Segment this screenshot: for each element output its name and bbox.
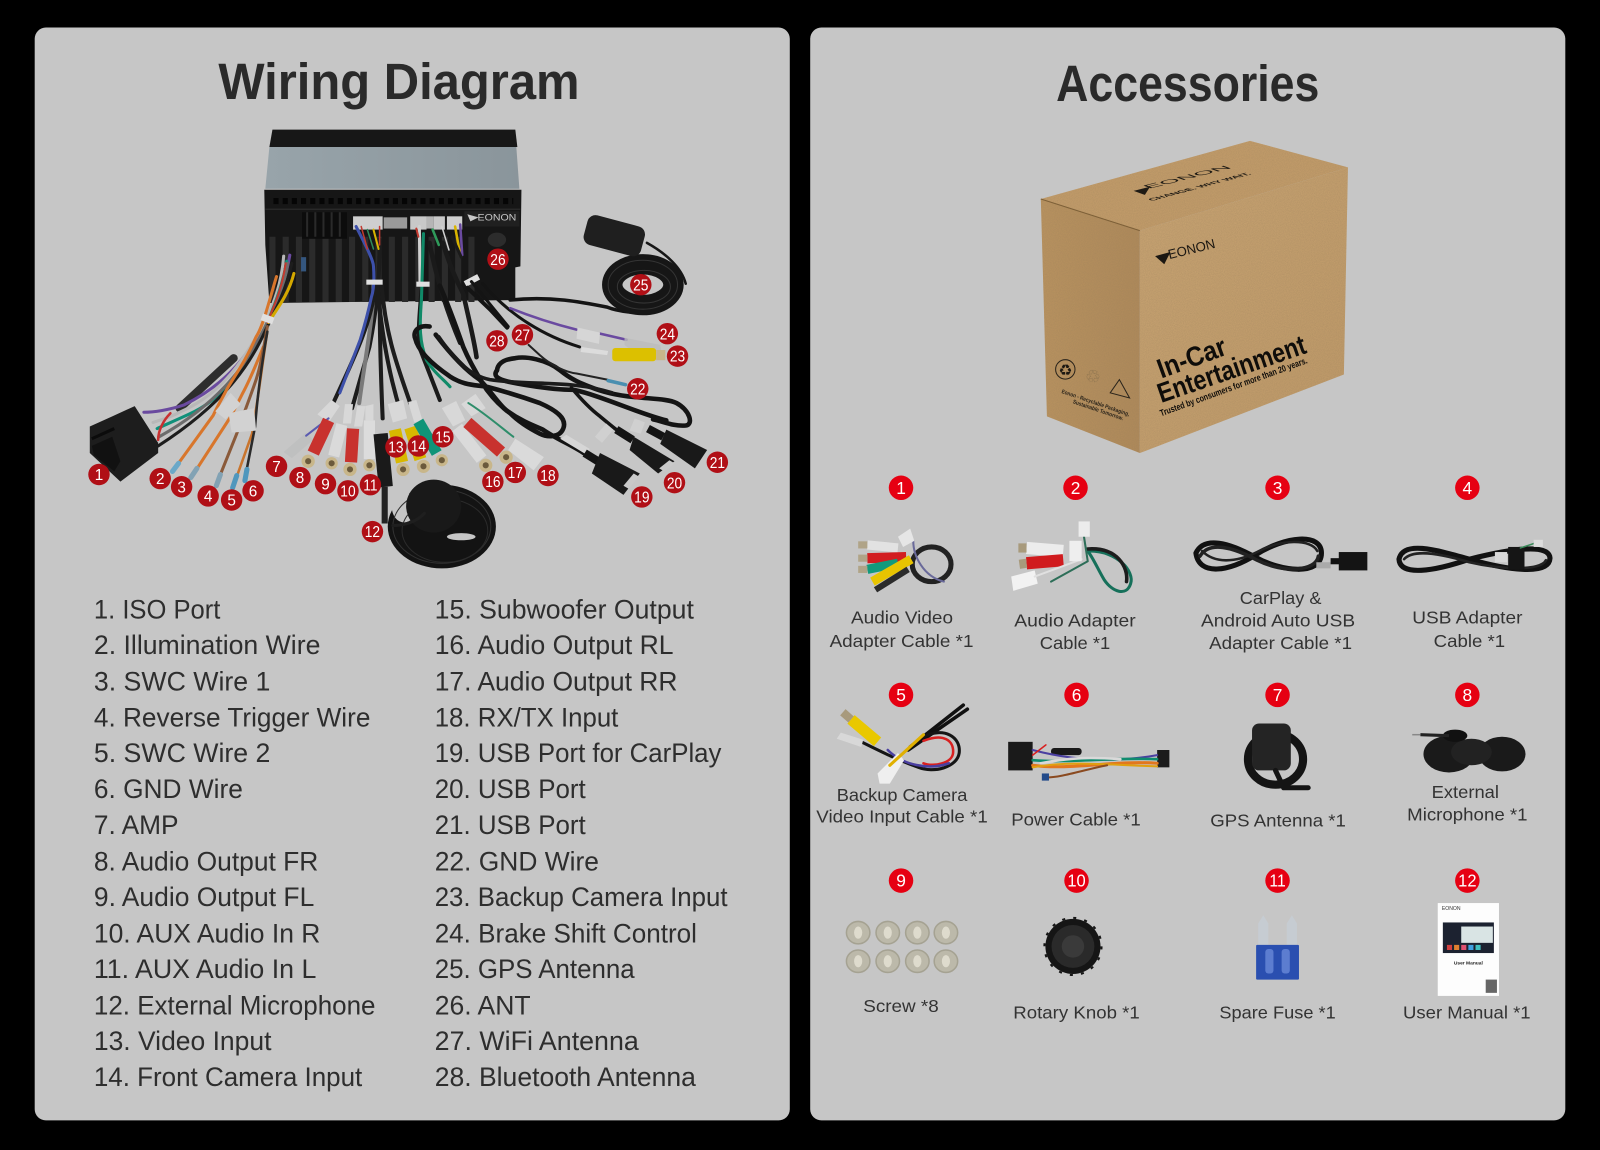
port list column 2: 26. ANT <box>435 990 531 1020</box>
number badges on wiring diagram: 2 <box>156 471 164 488</box>
badge 5: 5 <box>896 685 906 705</box>
number badges on wiring diagram: 18 <box>540 468 556 485</box>
label: User Manual *1 <box>1403 1002 1531 1022</box>
number badges on wiring diagram: 1 <box>95 467 103 484</box>
RCA 10 AUX R <box>343 429 357 476</box>
label: Rotary Knob *1 <box>1013 1002 1140 1022</box>
item 10: rotary knob <box>1013 868 1140 1022</box>
wire 4 reverse trigger <box>218 327 267 480</box>
number badges on wiring diagram: 4 <box>204 489 213 506</box>
number badges on wiring diagram: 21 <box>710 455 725 472</box>
badge 3: 3 <box>1273 478 1282 498</box>
number badges on wiring diagram: 23 <box>670 349 685 366</box>
wire 22 gnd <box>529 345 607 380</box>
number badges on wiring diagram: 20 <box>667 475 682 492</box>
number badges on wiring diagram: 10 <box>340 483 356 500</box>
port list column 1: 13. Video Input <box>94 1026 272 1056</box>
badge 7: 7 <box>1273 685 1282 705</box>
port list column 2: 17. Audio Output RR <box>435 666 678 696</box>
number badges on wiring diagram: 14 <box>411 439 426 456</box>
head unit rear view <box>264 130 521 303</box>
ISO harness wires <box>144 255 294 488</box>
manual icon: User Manual <box>1454 960 1484 966</box>
cable icon <box>837 705 967 784</box>
badge 7 <box>1265 683 1290 707</box>
brand logo on unit: EONON <box>478 212 516 222</box>
badge 10 <box>1064 868 1089 893</box>
badge 6: 6 <box>1072 685 1081 705</box>
port list column 1: 3. SWC Wire 1 <box>94 666 270 696</box>
badge 9 <box>889 868 913 893</box>
box top logo: CHANGE. WHY WAIT. <box>1146 172 1254 202</box>
port list column 1: 10. AUX Audio In R <box>94 918 320 948</box>
number badges on wiring diagram: 28 <box>489 333 505 350</box>
badge 11: 11 <box>1269 871 1286 891</box>
port list column 2: 15. Subwoofer Output <box>435 594 695 624</box>
port list column 1: 12. External Microphone <box>94 990 376 1020</box>
label: USB Adapter <box>1412 607 1522 627</box>
box front logo: EONON <box>1166 236 1217 262</box>
box top logo: EONON <box>1140 165 1235 190</box>
number badges on wiring diagram: 26 <box>490 252 506 269</box>
RCA 9 audio output FL <box>326 424 342 469</box>
number badges on wiring diagram: 3 <box>177 479 186 496</box>
port list column 2: 25. GPS Antenna <box>435 954 635 984</box>
screws icon <box>846 921 958 972</box>
label line 2: Android Auto USB <box>1201 611 1355 631</box>
port list column 1: 1. ISO Port <box>94 594 221 624</box>
badge 12: 12 <box>1458 871 1477 891</box>
label: Audio Adapter <box>1014 611 1136 631</box>
port list column 2: 22. GND Wire <box>435 846 599 876</box>
label: GPS Antenna *1 <box>1210 811 1346 831</box>
port list column 1: 14. Front Camera Input <box>94 1062 363 1092</box>
label: CarPlay & <box>1240 588 1322 608</box>
badge 4 <box>1455 476 1480 500</box>
label: Audio Video <box>851 607 953 627</box>
number badges on wiring diagram: 9 <box>321 476 330 493</box>
port list column 1: 8. Audio Output FR <box>94 846 318 876</box>
USB port 20 <box>595 423 674 473</box>
number badges on wiring diagram: 17 <box>508 465 523 482</box>
box recycling marks <box>1056 360 1130 422</box>
label: Screw *8 <box>863 996 939 1016</box>
port list column 2: 24. Brake Shift Control <box>435 918 697 948</box>
port list column 1: 9. Audio Output FL <box>94 882 314 912</box>
badge 6 <box>1064 683 1089 707</box>
panel: accessories <box>810 28 1565 1120</box>
item 2: audio adapter cable <box>1011 476 1136 653</box>
USB port 19 <box>560 435 640 495</box>
label: External <box>1432 782 1499 802</box>
title: Accessories: Accessories <box>1056 55 1319 112</box>
port list column 1: 6. GND Wire <box>94 774 243 804</box>
wire 3 swc 1 <box>194 347 263 473</box>
box recycling marks: Sustainable Tomorrow. <box>1072 399 1124 422</box>
label line 2: Video Input Cable *1 <box>816 806 988 826</box>
number badges on wiring diagram: 7 <box>272 459 281 476</box>
connector 7 AMP <box>284 418 329 458</box>
antenna icon <box>1248 723 1308 788</box>
RCA 14 front camera <box>410 428 430 473</box>
label: Power Cable *1 <box>1011 810 1141 830</box>
wires 27 28 antennas <box>471 282 508 327</box>
label: Backup Camera <box>837 785 967 805</box>
item 12: user manual <box>1403 868 1531 1022</box>
item 9: screws <box>846 868 958 1016</box>
manual icon: EONON <box>1442 906 1461 912</box>
number badges on wiring diagram: 19 <box>634 490 649 507</box>
port list column 2: 28. Bluetooth Antenna <box>435 1062 696 1092</box>
cable icon <box>1399 540 1550 570</box>
RCA 8 audio output FR <box>302 420 329 468</box>
cable icon <box>1196 539 1367 570</box>
box slogan: In-Car <box>1153 331 1231 384</box>
badge 2 <box>1063 476 1088 500</box>
manual icon <box>1438 903 1499 996</box>
item 8: external microphone <box>1407 683 1528 824</box>
port list column 1: 5. SWC Wire 2 <box>94 738 270 768</box>
ISO connector <box>90 406 158 482</box>
badge 12 <box>1455 868 1480 893</box>
number badges on wiring diagram: 25 <box>633 277 648 294</box>
box recycling marks: Eonon - Recyclable Packaging, <box>1061 389 1130 418</box>
microphone icon <box>1412 730 1526 772</box>
number badges on wiring diagram: 22 <box>630 381 645 398</box>
item 6: power cable <box>1008 683 1169 830</box>
number badges on wiring diagram: 16 <box>485 474 501 491</box>
number badges on wiring diagram: 27 <box>515 327 530 344</box>
badge 2: 2 <box>1071 478 1080 498</box>
badge 1: 1 <box>896 478 906 498</box>
port list column 2: 20. USB Port <box>435 774 586 804</box>
port list column 2: 21. USB Port <box>435 810 586 840</box>
central RCA wire bundle <box>317 224 486 427</box>
cable icon <box>1011 521 1131 592</box>
box slogan <box>1153 329 1310 418</box>
port list column 1: 11. AUX Audio In L <box>94 954 316 984</box>
knob icon <box>1044 918 1102 975</box>
port list column 1: 2. Illumination Wire <box>94 630 320 660</box>
USB cables <box>415 286 690 453</box>
badge 8 <box>1455 683 1480 707</box>
item 1: audio video adapter cable <box>830 476 974 651</box>
RCA label tags <box>317 394 486 427</box>
item 5: backup camera video input cable <box>816 683 988 826</box>
number badges on wiring diagram: 13 <box>388 440 404 457</box>
badge 5 <box>889 683 913 707</box>
badge 4: 4 <box>1463 478 1473 498</box>
panel: wiring diagram <box>35 28 790 1120</box>
badge 9: 9 <box>896 871 906 891</box>
port list column 2 <box>435 594 728 1092</box>
connector 18 RX/TX <box>468 403 544 470</box>
fuse icon <box>1256 915 1299 980</box>
label line 2: Microphone *1 <box>1407 804 1528 824</box>
label line 3: Adapter Cable *1 <box>1209 633 1352 653</box>
wiring connectors <box>353 216 462 230</box>
label line 2: Adapter Cable *1 <box>830 631 974 651</box>
brand logo on unit <box>467 212 516 222</box>
port list column 1: 7. AMP <box>94 810 179 840</box>
RCA 17 audio RR <box>467 422 513 464</box>
badge 8: 8 <box>1463 685 1472 705</box>
wire tags <box>215 393 241 419</box>
GPS antenna <box>510 213 686 312</box>
number badges on wiring diagram: 11 <box>363 477 378 494</box>
number badges on wiring diagram: 8 <box>296 470 304 487</box>
RCA 15 subwoofer <box>418 421 448 466</box>
port list column 1 <box>94 594 376 1092</box>
badge 10: 10 <box>1067 871 1086 891</box>
port list column 1: 4. Reverse Trigger Wire <box>94 703 370 733</box>
port list column 2: 27. WiFi Antenna <box>435 1026 639 1056</box>
port list column 2: 19. USB Port for CarPlay <box>435 738 722 768</box>
label line 2: Cable *1 <box>1434 631 1505 651</box>
cable icon <box>1008 742 1169 781</box>
cable tie <box>261 313 274 324</box>
badge 1 <box>889 476 913 500</box>
item 4: USB adapter cable <box>1399 476 1550 651</box>
number badges on wiring diagram: 6 <box>249 483 257 500</box>
RCA 13 video input <box>395 430 410 476</box>
box slogan: Entertainment <box>1153 329 1310 409</box>
wire 5 swc 2 <box>236 332 267 480</box>
port list column 2: 23. Backup Camera Input <box>435 882 728 912</box>
item 3: CarPlay and Android Auto USB adapter cable <box>1196 476 1367 653</box>
wire 2 illumination <box>176 277 277 467</box>
number badges on wiring diagram: 5 <box>227 493 236 510</box>
number badges on wiring diagram: 12 <box>365 524 380 541</box>
external microphone <box>381 434 496 568</box>
port list column 2: 18. RX/TX Input <box>435 703 619 733</box>
RCA 16 audio RL <box>457 428 492 472</box>
box recycling marks: ♻ <box>1058 363 1072 380</box>
title: Wiring Diagram: Wiring Diagram <box>218 53 580 110</box>
label line 2: Cable *1 <box>1040 633 1110 653</box>
number badges on wiring diagram: 24 <box>660 326 675 343</box>
port list column 2: 16. Audio Output RL <box>435 630 673 660</box>
RCA 11 AUX L <box>363 420 376 471</box>
cardboard box <box>1041 141 1348 453</box>
cable icon <box>858 529 951 590</box>
number badges on wiring diagram <box>88 248 728 542</box>
USB port 21 <box>630 418 707 468</box>
badge 3 <box>1265 476 1290 500</box>
badge 11 <box>1265 868 1290 893</box>
label: Spare Fuse *1 <box>1219 1002 1336 1022</box>
backup camera and brake cables <box>467 282 665 385</box>
item 11: spare fuse <box>1219 868 1336 1022</box>
wire 6 gnd <box>246 332 267 473</box>
box slogan: Trusted by consumers for more than 20 years. <box>1158 355 1309 418</box>
number badges on wiring diagram: 15 <box>435 429 451 446</box>
box recycling marks: ♲ <box>1085 367 1101 387</box>
item 7: GPS antenna <box>1210 683 1346 831</box>
